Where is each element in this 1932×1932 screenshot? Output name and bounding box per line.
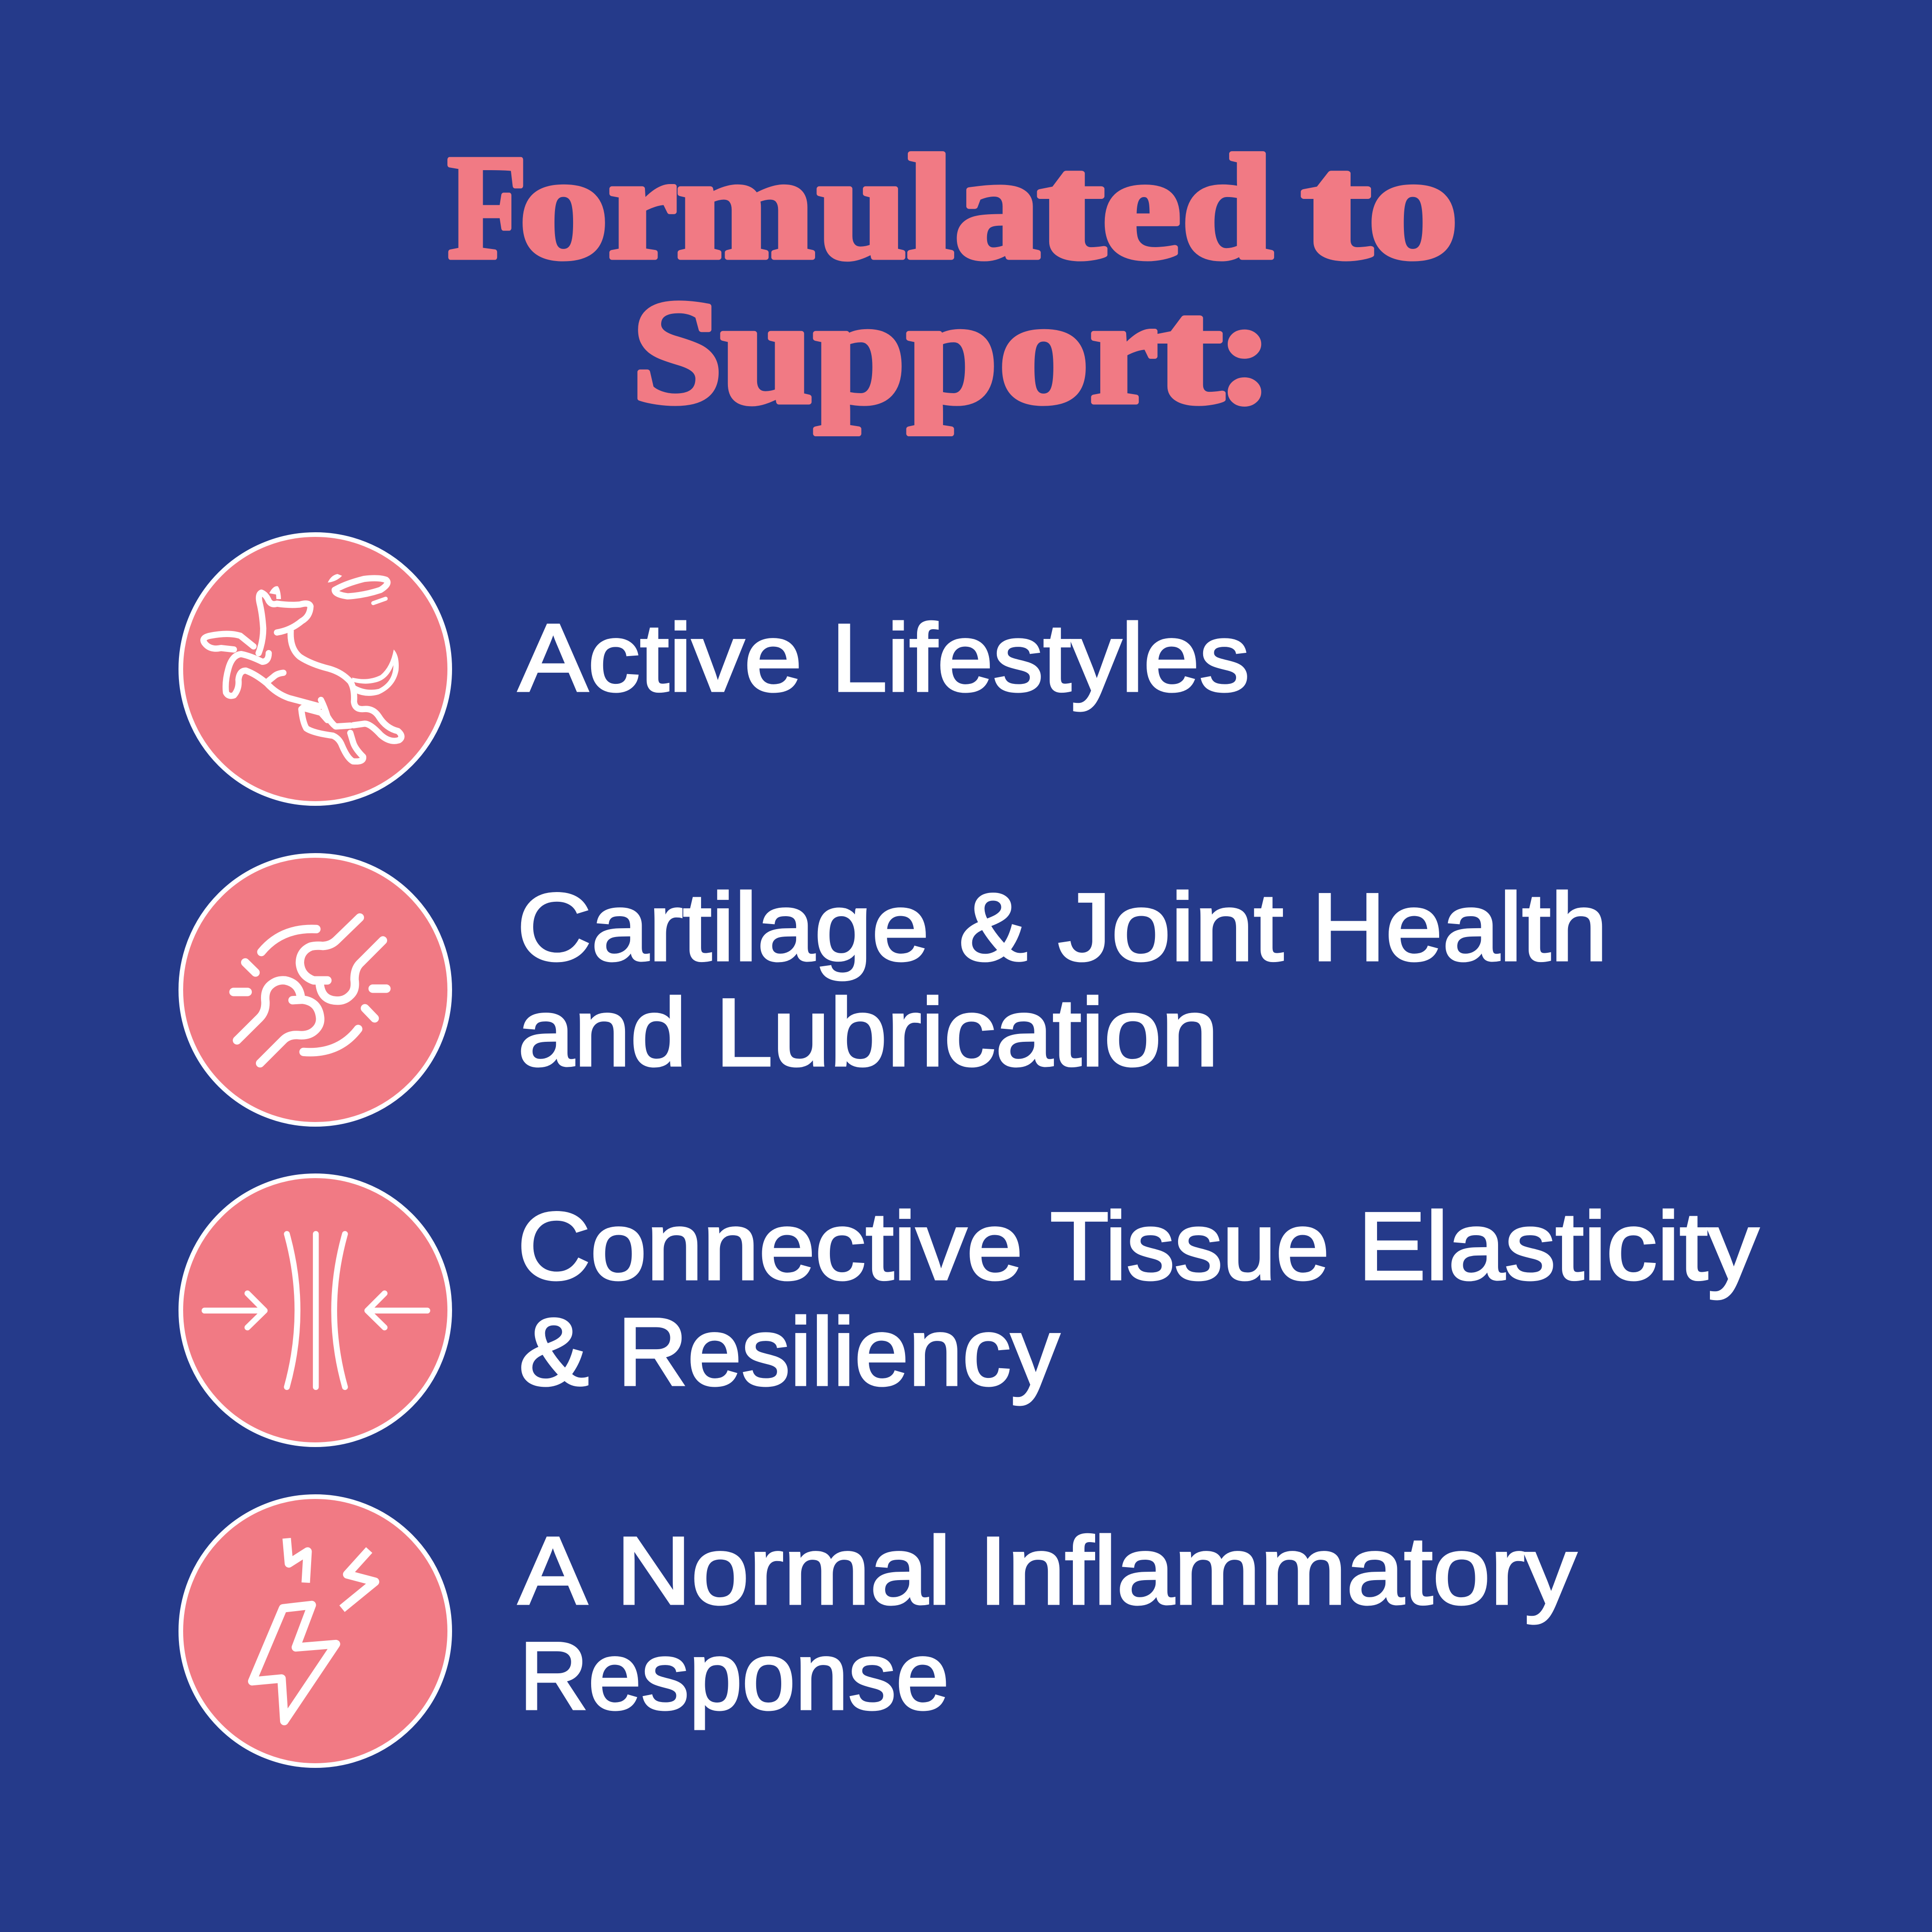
text: cartilage and joint health: and: [518, 979, 687, 1086]
title: t: [1301, 124, 1374, 290]
title: [447, 124, 1459, 434]
text: inflammatory response: A: [518, 1517, 587, 1624]
title: r: [608, 124, 677, 290]
text: cartilage and joint health: Joint: [1058, 874, 1283, 981]
title: u: [817, 124, 907, 290]
title: p: [907, 269, 998, 434]
text: cartilage and joint health: Cartilage: [517, 874, 929, 981]
text: inflammatory response: Inflammatory: [979, 1517, 1577, 1624]
icon: joint: [181, 855, 450, 1124]
text: connective tissue: &: [519, 1298, 589, 1405]
title: :: [1217, 269, 1274, 434]
title: o: [998, 269, 1090, 434]
title: d: [1181, 124, 1273, 290]
text: cartilage and joint health: [517, 874, 1607, 1086]
title: e: [1102, 124, 1181, 290]
text: inflammatory response: Normal: [616, 1517, 951, 1624]
panel: connective tissue: [181, 1176, 1759, 1445]
title: t: [1155, 269, 1225, 434]
title: m: [676, 124, 815, 290]
text: cartilage and joint health: Health: [1312, 874, 1607, 981]
text: active lifestyles: Active: [518, 604, 802, 711]
title: t: [1037, 124, 1107, 290]
title: p: [814, 269, 905, 434]
icon: dog leaping for frisbee: [181, 535, 450, 803]
title: l: [907, 124, 954, 290]
text: inflammatory response: [518, 1517, 1577, 1729]
icon: compressing tissue with arrows: [181, 1176, 450, 1445]
text: active lifestyles: Lifestyles: [831, 604, 1250, 711]
icon: lightning bolts: [181, 1497, 450, 1766]
title: o: [519, 124, 609, 290]
title: a: [954, 124, 1040, 290]
text: connective tissue: Elasticity: [1358, 1192, 1759, 1300]
text: cartilage and joint health: Lubrication: [715, 979, 1218, 1086]
title: F: [447, 124, 527, 290]
panel: inflammatory response: [181, 1497, 1577, 1766]
panel: cartilage and joint health: [181, 855, 1607, 1124]
title: r: [1090, 269, 1158, 434]
text: inflammatory response: Response: [519, 1622, 949, 1729]
text: cartilage and joint health: &: [959, 874, 1027, 981]
title: o: [1368, 124, 1459, 290]
text: connective tissue: [517, 1192, 1759, 1405]
text: connective tissue: Tissue: [1050, 1192, 1329, 1300]
title: u: [721, 269, 813, 434]
title: S: [631, 269, 723, 434]
text: connective tissue: Resiliency: [618, 1298, 1060, 1405]
panel: active lifestyles: [181, 535, 1250, 803]
text: connective tissue: Connective: [517, 1192, 1023, 1300]
